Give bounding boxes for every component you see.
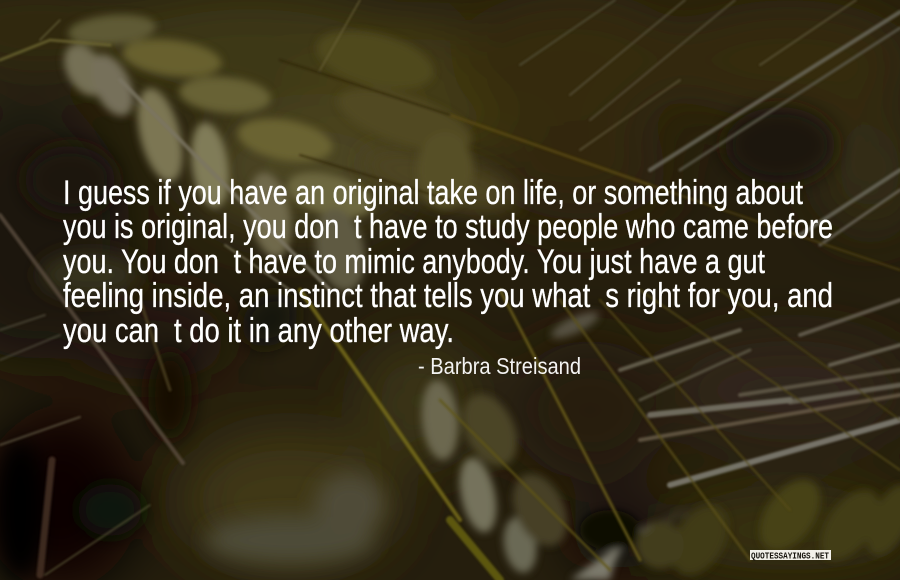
quote line 5: you can't do it in any other way. (63, 312, 454, 350)
quote line 3: you. You don't have to mimic anybody. You just have a gut (63, 243, 765, 281)
watermark badge: QUOTESSAYINGS.NET (751, 550, 829, 562)
quote line 4: feeling inside, an instinct that tells you what's right for you, and (63, 277, 833, 315)
author attribution: - Barbra Streisand (418, 353, 581, 379)
quote text (63, 174, 833, 350)
